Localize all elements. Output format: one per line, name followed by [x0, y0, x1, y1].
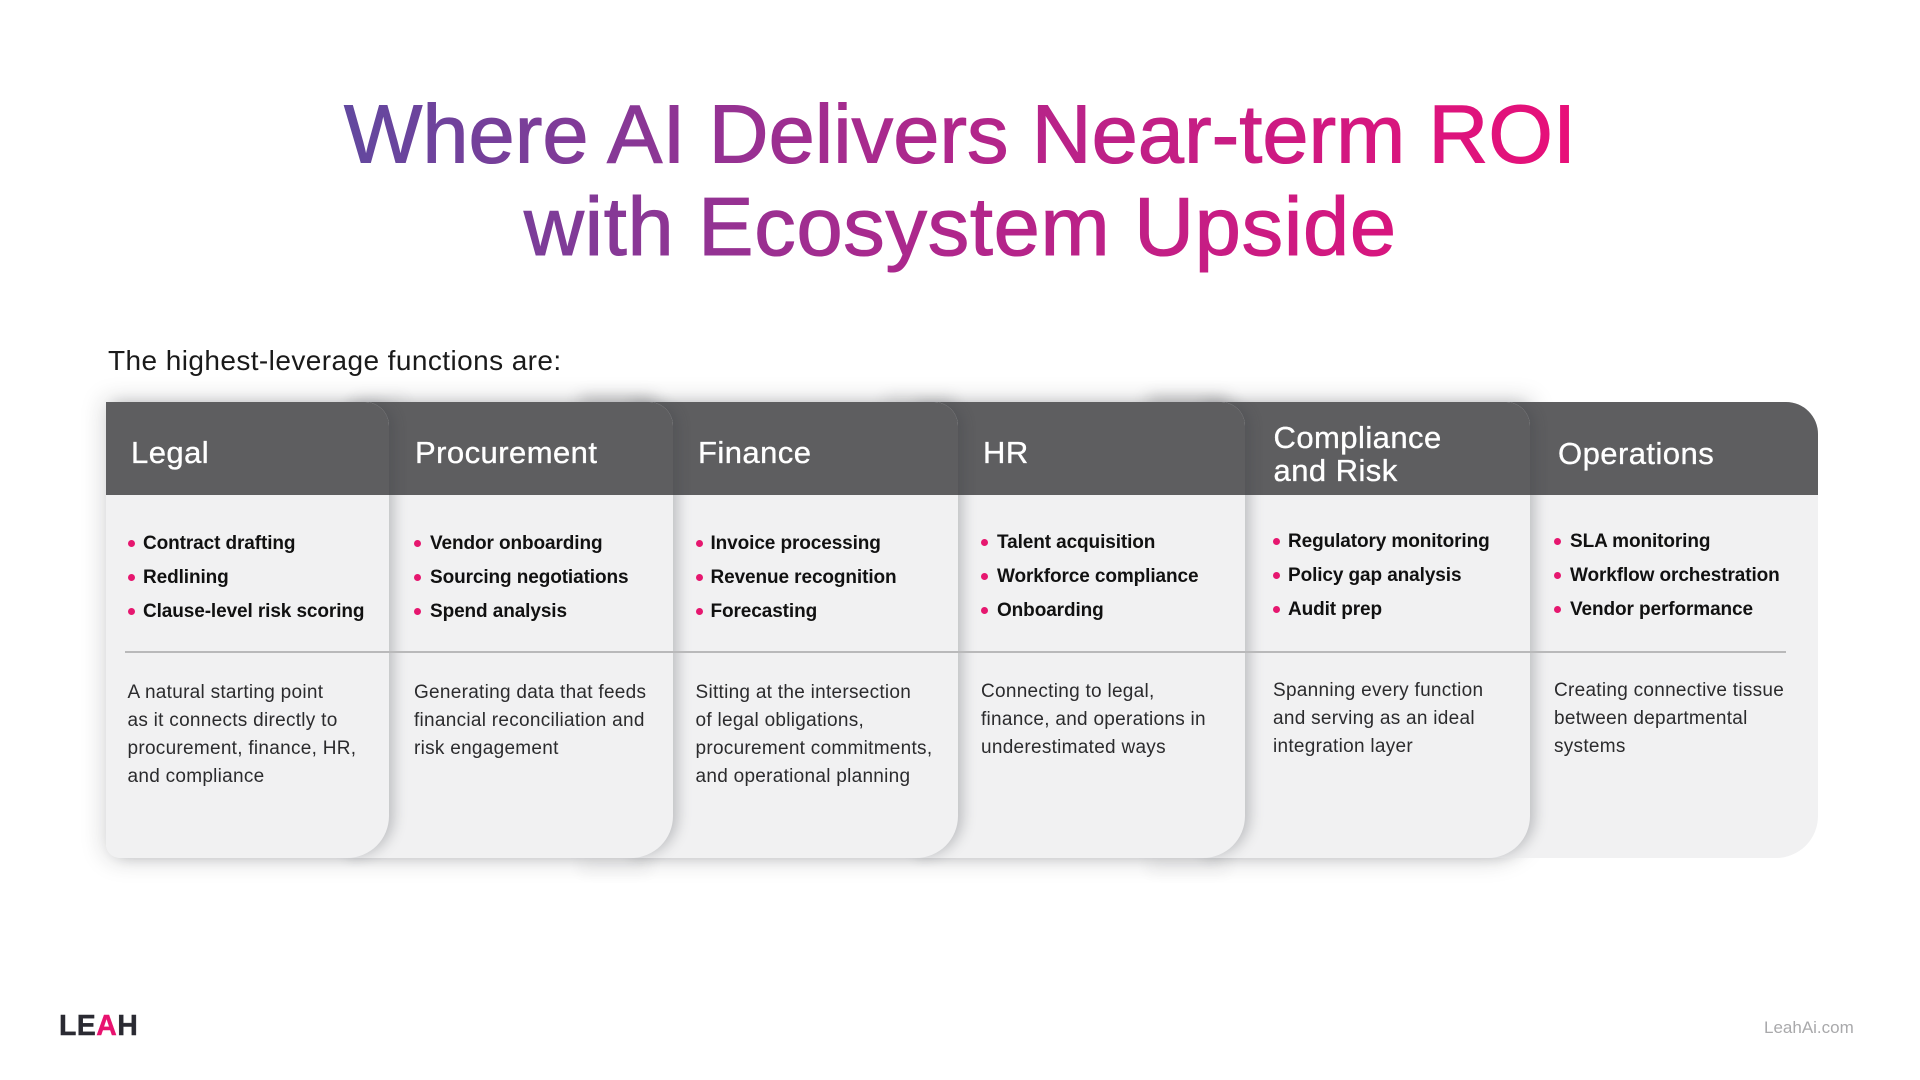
- description: Legal: and compliance: [128, 766, 265, 787]
- list: HR functions: Workforce compliance: [997, 566, 1198, 586]
- description: Operations: systems: [1554, 736, 1626, 757]
- header: Operations: [1480, 402, 1818, 495]
- list: Compliance functions: Policy gap analysis: [1288, 564, 1461, 586]
- description: Procurement: Generating data that feeds: [414, 682, 646, 703]
- description: HR: underestimated ways: [981, 737, 1166, 758]
- list: Compliance functions: Regulatory monitoring: [1288, 530, 1490, 552]
- description: Finance: Sitting at the intersection: [696, 682, 911, 703]
- header: Procurement: Procurement: [415, 435, 597, 470]
- title: with Ecosystem Upside: [523, 180, 1396, 273]
- list: Finance functions: Revenue recognition: [710, 566, 897, 588]
- description: Procurement: [414, 682, 646, 759]
- list: Compliance functions: [1273, 530, 1490, 620]
- title: Where AI Delivers Near-term ROI: [344, 88, 1576, 180]
- description: HR: [981, 681, 1206, 758]
- description: Legal: as it connects directly to: [128, 710, 338, 731]
- header: HR: [908, 402, 1245, 495]
- intro text: The highest-leverage functions are:: [108, 345, 562, 376]
- description: HR: Connecting to legal,: [981, 681, 1155, 702]
- list: Legal functions: Clause-level risk scoring: [143, 600, 364, 622]
- list: Finance functions: Forecasting: [710, 600, 817, 622]
- list: Compliance functions: Audit prep: [1288, 598, 1382, 620]
- header: HR: HR: [983, 435, 1029, 470]
- list: HR functions: [981, 532, 1198, 620]
- list: Operations functions: Vendor performance: [1570, 598, 1753, 620]
- header: Operations: Operations: [1558, 436, 1714, 471]
- description: Compliance and Risk: and serving as an ideal: [1273, 708, 1475, 729]
- description: Finance: procurement commitments,: [696, 738, 932, 759]
- description: Finance: of legal obligations,: [696, 710, 864, 731]
- panel: Finance: [623, 402, 958, 858]
- description: Operations: [1554, 680, 1784, 757]
- list: Procurement functions: Sourcing negotiations: [430, 566, 628, 588]
- list: Legal functions: [128, 532, 364, 622]
- header: Legal: [106, 402, 389, 495]
- panel: HR: [908, 402, 1245, 858]
- title: [344, 88, 1576, 273]
- list: Finance functions: Invoice processing: [710, 532, 881, 554]
- description: Compliance and Risk: integration layer: [1273, 736, 1413, 757]
- description: Operations: Creating connective tissue: [1554, 680, 1784, 701]
- list: Legal functions: Contract drafting: [143, 532, 295, 554]
- list: Procurement functions: Spend analysis: [430, 600, 567, 622]
- description: Compliance and Risk: Spanning every function: [1273, 680, 1483, 701]
- list: Legal functions: Redlining: [143, 566, 229, 588]
- header: Legal: Legal: [131, 435, 209, 470]
- panel: Compliance and Risk: [1195, 402, 1530, 858]
- website: LeahAi.com: [1764, 1018, 1854, 1037]
- header: Compliance and Risk: Compliance: [1274, 420, 1442, 455]
- description: Legal: procurement, finance, HR,: [128, 738, 356, 759]
- panel: Procurement: [339, 402, 673, 858]
- panel: Legal: [106, 402, 389, 858]
- list: Finance functions: [696, 532, 897, 622]
- description: Procurement: financial reconciliation and: [414, 710, 645, 731]
- logo: LEAH: [59, 1010, 138, 1042]
- list: Procurement functions: Vendor onboarding: [430, 532, 602, 554]
- header: Compliance and Risk: and Risk: [1274, 453, 1398, 488]
- description: Procurement: risk engagement: [414, 738, 559, 759]
- description: Finance: [696, 682, 932, 787]
- description: Legal: [128, 682, 356, 787]
- list: Operations functions: SLA monitoring: [1570, 530, 1710, 552]
- description: Compliance and Risk: [1273, 680, 1483, 757]
- list: HR functions: Talent acquisition: [997, 532, 1155, 552]
- header: Finance: Finance: [698, 435, 811, 470]
- list: HR functions: Onboarding: [997, 600, 1104, 620]
- list: Procurement functions: [414, 532, 628, 622]
- description: HR: finance, and operations in: [981, 709, 1206, 730]
- description: Operations: between departmental: [1554, 708, 1748, 729]
- header: Finance: [623, 402, 958, 495]
- panel: Operations: [1480, 402, 1818, 858]
- list: Operations functions: [1554, 530, 1780, 620]
- header: Compliance and Risk: [1195, 402, 1530, 495]
- description: Finance: and operational planning: [696, 766, 910, 787]
- list: Operations functions: Workflow orchestration: [1570, 564, 1780, 586]
- description: Legal: A natural starting point: [128, 682, 323, 703]
- header: Procurement: [339, 402, 673, 495]
